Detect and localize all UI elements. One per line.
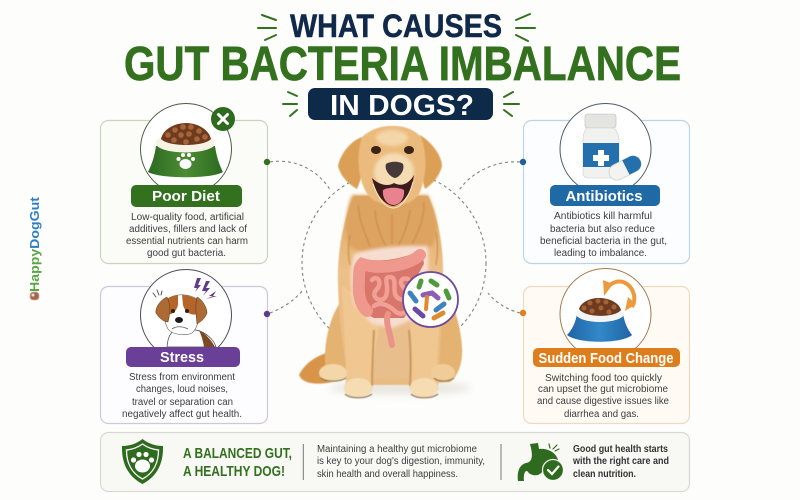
dog leg shadows (372, 330, 411, 386)
dog ears (338, 135, 442, 189)
panel text: negatively affect gut health. (122, 409, 242, 420)
banner box (100, 432, 690, 492)
rectum (387, 314, 392, 345)
panel text: beneficial bacteria in the gut, (540, 236, 667, 247)
brand logo (28, 196, 42, 300)
dog belly (374, 319, 410, 378)
panel text: diarrhea and gas. (564, 409, 639, 420)
panel text (122, 372, 242, 420)
large intestine (359, 255, 420, 311)
label pill: antibiotics (550, 185, 660, 206)
small intestine (372, 277, 408, 314)
dog head (359, 126, 425, 206)
bacteria magnifier (403, 272, 458, 327)
vertical logo text: HappyDogGut (28, 196, 42, 292)
panel text: good gut bacteria. (147, 248, 226, 259)
icon: logo dog (30, 292, 39, 300)
connector dot (520, 159, 526, 165)
dog neck ruff (346, 195, 436, 255)
dog torso (338, 196, 443, 385)
icon: pill bottle and capsule (560, 104, 651, 194)
stress bolts (194, 278, 217, 299)
icon: stomach with check (518, 443, 564, 481)
heading line: gut bacteria imbalance: GUT BACTERIA IMBALANCE (124, 38, 681, 91)
dog illustration (299, 126, 472, 398)
label pill: stress: Stress (160, 349, 204, 366)
ground shadow (328, 381, 472, 395)
intestine base (354, 250, 424, 318)
connector dot (264, 159, 270, 165)
panel text: Switching food too quickly (545, 373, 662, 384)
title (124, 8, 681, 122)
panel box (100, 286, 268, 424)
icon: stressed dog (140, 270, 232, 360)
dog muzzle (374, 153, 414, 191)
panel: bottom banner (100, 432, 690, 492)
icon: green food bowl (140, 104, 232, 194)
connector dot (264, 311, 270, 317)
intestines (351, 246, 428, 345)
panel text: travel or separation can (132, 397, 233, 408)
panel: stress (100, 270, 270, 424)
dashed connectors (270, 161, 520, 355)
panel: poor diet (100, 104, 270, 264)
icon: paw shield (122, 439, 163, 484)
banner heading: A BALANCED GUT, (183, 445, 292, 462)
banner text: Maintaining a healthy gut microbiome (317, 444, 477, 455)
panel text: bacteria but also reduce (550, 224, 655, 235)
dog front legs (342, 285, 443, 390)
panel text: leading to imbalance. (554, 248, 647, 259)
panel text: Stress from environment (129, 372, 235, 383)
banner heading (183, 445, 292, 480)
label pill: poor diet (131, 185, 242, 207)
dog haunches (325, 262, 462, 384)
panel text: Low-quality food, artificial (131, 212, 244, 223)
heading pill: in dogs: IN DOGS? (330, 90, 474, 122)
dog mouth (372, 175, 414, 206)
dog tail (299, 350, 345, 384)
panel text: changes, loud noises, (136, 384, 228, 395)
panel text: Antibiotics kill harmful (554, 211, 652, 222)
banner text (317, 444, 485, 480)
label pill: sudden food change: Sudden Food Change (538, 350, 674, 367)
dog nose (386, 162, 403, 178)
dog paws (319, 364, 455, 398)
icon: x badge (211, 107, 235, 131)
panel box (100, 120, 268, 264)
intestine backing (351, 246, 428, 328)
panel text: additives, fillers and lack of (129, 224, 247, 235)
heading line: what causes: WHAT CAUSES (290, 8, 502, 44)
banner closing text: Good gut health starts (573, 444, 668, 455)
banner heading: A HEALTHY DOG! (183, 463, 285, 480)
panel: sudden food change (520, 268, 690, 424)
panel: antibiotics (520, 104, 690, 264)
panel text: essential nutrients can harm (126, 236, 248, 247)
connector dot (520, 310, 526, 316)
label pill: poor diet: Poor Diet (152, 188, 220, 205)
panel text (537, 373, 669, 420)
panel text: and cause digestive issues like (537, 396, 669, 407)
label pill: antibiotics: Antibiotics (566, 188, 642, 205)
icon: blue bowl with arrows (560, 268, 651, 360)
panel box (524, 120, 690, 264)
panel text: can upset the gut microbiome (538, 384, 668, 395)
dog eyes (371, 146, 414, 154)
banner text: skin health and overall happiness. (317, 469, 458, 480)
panel box (524, 286, 690, 424)
dog tongue (383, 188, 404, 205)
banner closing text: clean nutrition. (573, 469, 636, 480)
label pill: stress (126, 347, 240, 367)
dog chest fur (348, 202, 438, 265)
banner text: is key to your dog's digestion, immunity, (317, 456, 485, 467)
panel text (540, 211, 667, 259)
change arrows (603, 280, 636, 311)
panel text (126, 212, 248, 259)
banner closing text (572, 444, 669, 480)
dog forehead (376, 130, 408, 146)
banner closing text: with the right care and (572, 456, 669, 467)
title accent rays (258, 14, 535, 116)
